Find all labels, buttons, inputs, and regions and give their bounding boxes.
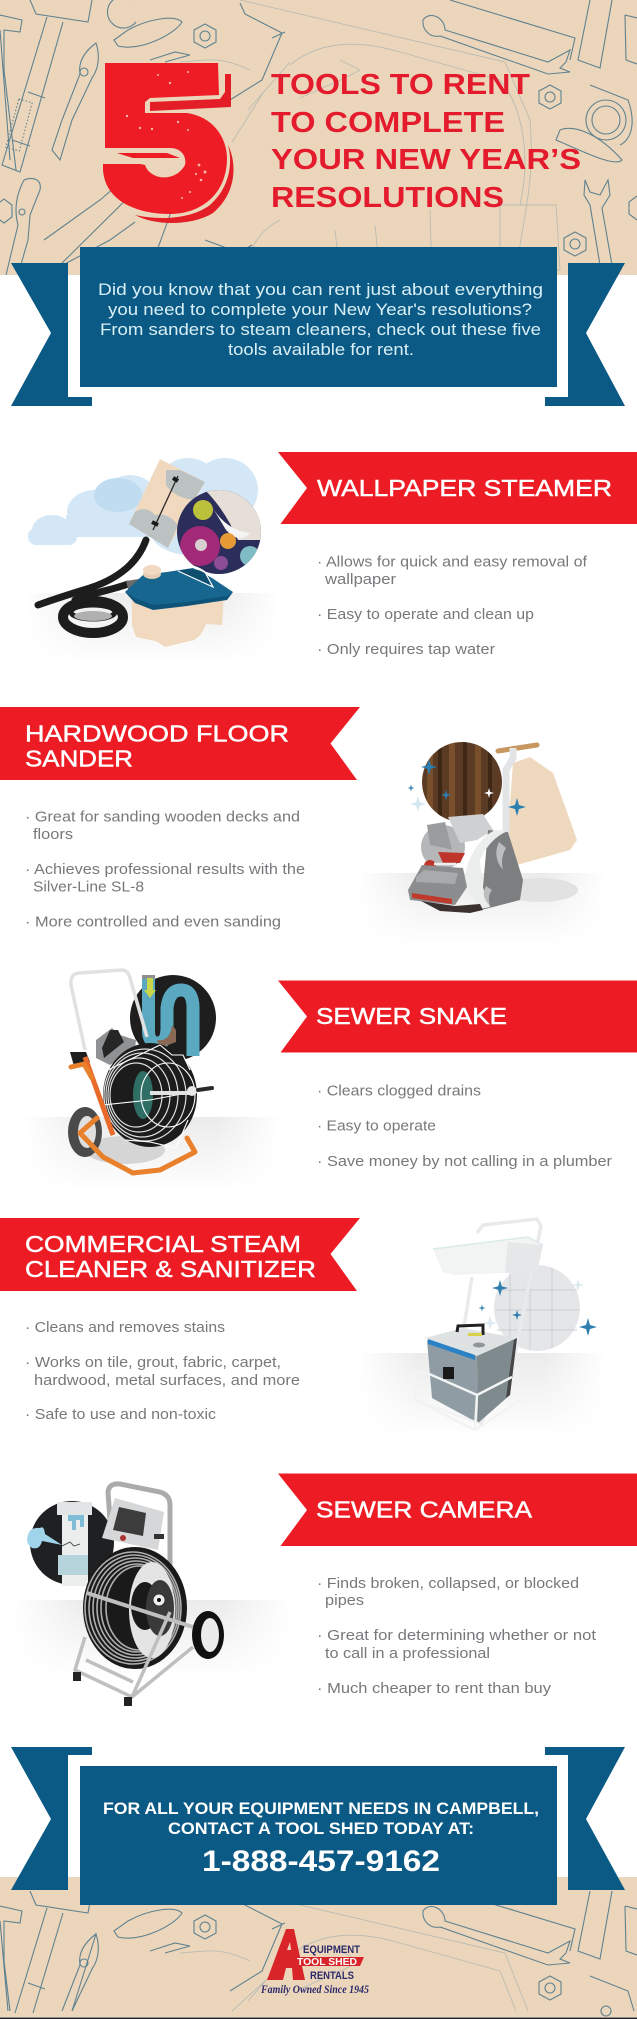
section 2 banner — [0, 707, 360, 780]
title: TO COMPLETE — [271, 107, 505, 139]
logo — [260, 1929, 369, 1996]
section 2 bullets: Silver-Line SL-8 — [33, 879, 144, 896]
section 5 bullets: · Much cheaper to rent than buy — [317, 1680, 552, 1697]
section 4 banner — [0, 1218, 360, 1291]
section 1 bullets: · Allows for quick and easy removal of — [317, 554, 588, 571]
intro ribbon with text: Did you know that you can rent just about everything — [98, 280, 543, 299]
section 2 banner: SANDER — [25, 746, 133, 772]
section 2 banner: HARDWOOD FLOOR — [25, 721, 289, 747]
contact ribbon: FOR ALL YOUR EQUIPMENT NEEDS IN CAMPBELL, — [103, 1799, 539, 1818]
section 5 bullets: · Great for determining whether or not — [317, 1627, 597, 1644]
section 2 bullets: · More controlled and even sanding — [25, 914, 281, 931]
contact ribbon: 1-888-457-9162 — [202, 1845, 440, 1878]
illustration: sewer snake — [51, 968, 253, 1176]
illustration: hardwood floor sander — [384, 742, 580, 916]
section 4 bullets — [25, 1319, 300, 1423]
section 1 bullets: · Only requires tap water — [317, 641, 495, 658]
section 4 bullets: hardwood, metal surfaces, and more — [34, 1372, 300, 1389]
logo: RENTALS — [310, 1970, 354, 1982]
title: TOOLS TO RENT — [271, 69, 531, 101]
section 2 bullets: · Achieves professional results with the — [25, 861, 305, 878]
section 4 banner: COMMERCIAL STEAM — [25, 1231, 301, 1257]
section 5 bullets: pipes — [325, 1592, 364, 1609]
section 3 bullets: · Easy to operate — [317, 1118, 436, 1134]
section 4 banner: CLEANER & SANITIZER — [25, 1256, 316, 1282]
title: RESOLUTIONS — [271, 182, 504, 214]
section 5 bullets — [317, 1575, 597, 1697]
section 1 banner — [278, 452, 637, 524]
logo: Family Owned Since 1945 — [260, 1982, 369, 1996]
big red number 5 — [103, 63, 234, 223]
intro ribbon with text: From sanders to steam cleaners, check out these five — [100, 320, 541, 339]
section 3 banner: SEWER SNAKE — [316, 1003, 507, 1029]
section 5 banner — [278, 1474, 637, 1546]
intro ribbon with text: tools available for rent. — [228, 340, 414, 359]
contact ribbon: CONTACT A TOOL SHED TODAY AT: — [168, 1819, 474, 1838]
contact ribbon — [11, 1747, 625, 1905]
section 3 bullets: · Clears clogged drains — [317, 1082, 481, 1100]
section 2 bullets: · Great for sanding wooden decks and — [25, 809, 300, 826]
bottom tan background with tool line art — [0, 1877, 637, 2019]
section 4 bullets: · Safe to use and non-toxic — [25, 1406, 217, 1423]
section 4 bullets: · Works on tile, grout, fabric, carpet, — [25, 1354, 281, 1371]
section 3 bullets: · Save money by not calling in a plumber — [317, 1153, 612, 1170]
section 1 bullets: wallpaper — [324, 571, 396, 588]
section 1 bullets: · Easy to operate and clean up — [317, 606, 534, 623]
section 4 bullets: · Cleans and removes stains — [25, 1319, 225, 1336]
title: YOUR NEW YEAR’S — [271, 144, 581, 176]
section 1 bullets — [317, 554, 588, 658]
section 2 bullets — [25, 809, 305, 931]
logo: TOOL SHED — [297, 1957, 357, 1968]
section 1 banner: WALLPAPER STEAMER — [317, 475, 612, 501]
top tan background with tool line art — [0, 0, 637, 275]
logo: EQUIPMENT — [303, 1944, 360, 1956]
illustration: sewer camera — [27, 1481, 260, 1706]
illustration: wallpaper steamer — [28, 458, 261, 647]
section 3 banner — [278, 980, 637, 1052]
illustration: commercial steam cleaner — [384, 1217, 597, 1431]
section 5 bullets: · Finds broken, collapsed, or blocked — [317, 1575, 579, 1592]
section 5 bullets: to call in a professional — [325, 1645, 490, 1662]
section 5 banner: SEWER CAMERA — [316, 1496, 533, 1522]
intro ribbon with text — [11, 247, 625, 406]
section 3 bullets — [317, 1082, 612, 1170]
section 2 bullets: floors — [33, 826, 73, 843]
intro ribbon with text: you need to complete your New Year's resolutions? — [108, 300, 532, 319]
title — [271, 69, 581, 214]
